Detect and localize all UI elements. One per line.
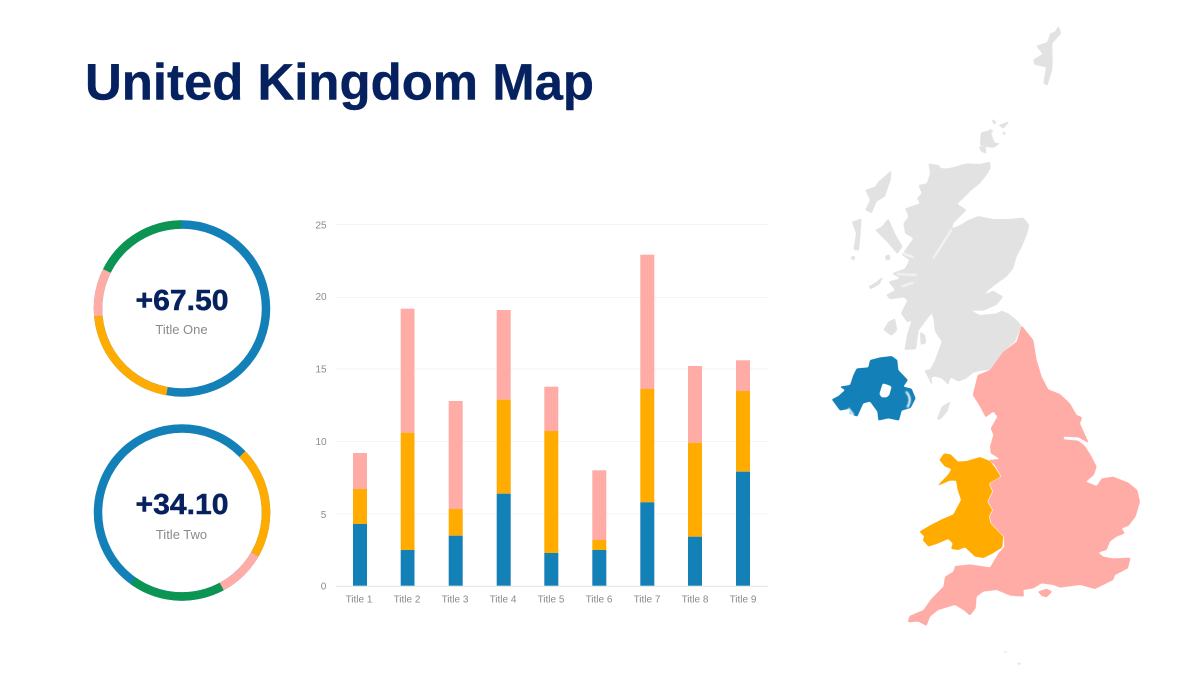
- bars: Title 5: [544, 387, 558, 586]
- y axis labels: 0: [321, 582, 327, 592]
- y axis labels: 5: [321, 510, 327, 521]
- label two: Title Two: [156, 527, 207, 542]
- bars: Title 4: [497, 310, 511, 586]
- map region: England: [908, 325, 1140, 665]
- value two: +34.10: [136, 489, 228, 521]
- y axis labels: 10: [315, 437, 327, 448]
- title: United Kingdom Map: [85, 54, 594, 110]
- bars: Title 1: [353, 453, 367, 586]
- bars: Title 3: [449, 401, 463, 586]
- stacked bar chart: [315, 220, 768, 606]
- x axis labels: Title 3: [442, 594, 469, 606]
- label one: Title One: [155, 322, 208, 337]
- map of the United Kingdom: [832, 25, 1140, 665]
- x axis labels: Title 5: [538, 594, 565, 606]
- bars: Title 7: [640, 255, 654, 586]
- x axis labels: Title 7: [634, 594, 661, 606]
- bars: Title 9: [736, 360, 750, 586]
- bars: Title 6: [592, 470, 606, 586]
- value one: +67.50: [136, 285, 228, 317]
- donut ring one: [98, 224, 266, 392]
- panel: ring metric one: [98, 224, 266, 392]
- map region: Northern Ireland: [832, 356, 916, 421]
- x axis labels: Title 1: [346, 594, 373, 606]
- y axis labels: 15: [315, 364, 327, 376]
- map region: Wales: [919, 453, 1003, 558]
- y axis labels: 25: [315, 220, 327, 232]
- x axis labels: Title 2: [394, 594, 421, 606]
- x axis labels: Title 8: [682, 594, 709, 606]
- map region: Scotland: [850, 25, 1061, 420]
- bars: Title 8: [688, 366, 702, 586]
- x axis labels: [346, 594, 757, 606]
- x axis labels: Title 4: [490, 594, 517, 606]
- bars: Title 2: [401, 309, 414, 586]
- panel: ring metric two: [98, 428, 266, 596]
- x axis labels: Title 6: [586, 594, 613, 606]
- donut ring two: [98, 428, 266, 596]
- x axis labels: Title 9: [730, 594, 757, 606]
- y axis labels: 20: [315, 292, 327, 303]
- y axis labels: [315, 220, 327, 592]
